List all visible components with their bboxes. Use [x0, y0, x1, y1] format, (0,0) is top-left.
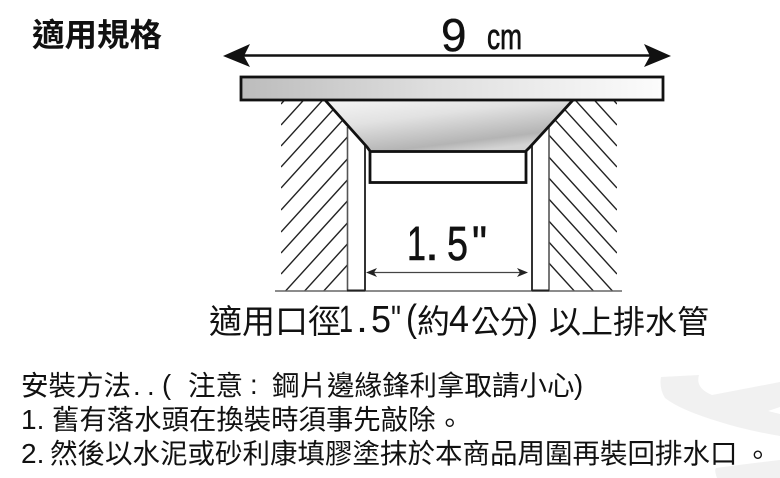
instruction heading and caution [21, 369, 583, 401]
instruction heading and caution: 注意 [188, 370, 243, 401]
top plate [241, 77, 663, 100]
caption: applicable drain diameter: 5 [371, 299, 391, 341]
caption: applicable drain diameter: ) [527, 298, 538, 340]
step 2: 。 [744, 440, 772, 471]
instruction heading and caution: . [147, 370, 155, 401]
hatched wall: right [550, 101, 617, 290]
installation instructions [21, 369, 772, 471]
step 2: 2. [21, 438, 44, 469]
hatched wall: left [281, 101, 347, 290]
background watermark swoosh [660, 375, 780, 478]
step 2: 然後以水泥或砂利康填膠塗抹於本商品周圍再裝回排水口 [50, 438, 738, 469]
pipe walls [347, 127, 549, 291]
label: 9 cm [441, 9, 522, 61]
label: 1.5 inch: 1 [407, 218, 426, 271]
label: 1.5 inch: " [472, 218, 487, 271]
label: 1.5 inch: . [425, 218, 439, 271]
caption: applicable drain diameter: 以上排水管 [549, 304, 709, 340]
instruction heading and caution: : [250, 369, 258, 400]
dimension arrow: 9 cm width [223, 44, 671, 67]
caption: applicable drain diameter: 約 [417, 303, 450, 340]
dimension arrow: 1.5 inch [366, 268, 528, 277]
label: 9 cm: 9 [441, 9, 466, 61]
ground line [275, 290, 622, 292]
instruction heading and caution: 鋼片邊緣鋒利拿取請小心 [272, 370, 574, 401]
caption: applicable drain diameter: 公分 [471, 304, 529, 340]
title: 適用規格 [32, 17, 162, 53]
instruction heading and caution: ( [162, 369, 171, 400]
caption: applicable drain diameter: 1 [339, 299, 353, 341]
label: 9 cm: cm [487, 16, 522, 57]
instruction heading and caution: . [133, 370, 141, 401]
caption: applicable drain diameter: " [391, 299, 401, 341]
step 1: 。 [436, 408, 463, 439]
funnel lower box [370, 152, 526, 182]
label: 1.5 inch: 5 [447, 218, 468, 271]
label: 1.5 inch [407, 218, 487, 271]
instruction heading and caution: ) [574, 369, 583, 400]
instruction heading and caution: 安裝方法 [21, 370, 131, 401]
caption: applicable drain diameter: 4 [449, 299, 469, 341]
step 1: 1. [21, 404, 44, 435]
caption: applicable drain diameter: 適用口徑 [209, 303, 341, 340]
funnel body [325, 100, 573, 151]
caption: applicable drain diameter [209, 298, 709, 341]
step 1: 舊有落水頭在換裝時須事先敲除 [52, 404, 435, 435]
caption: applicable drain diameter: . [356, 299, 368, 341]
caption: applicable drain diameter: ( [406, 298, 417, 340]
drain cross-section diagram [240, 76, 664, 292]
